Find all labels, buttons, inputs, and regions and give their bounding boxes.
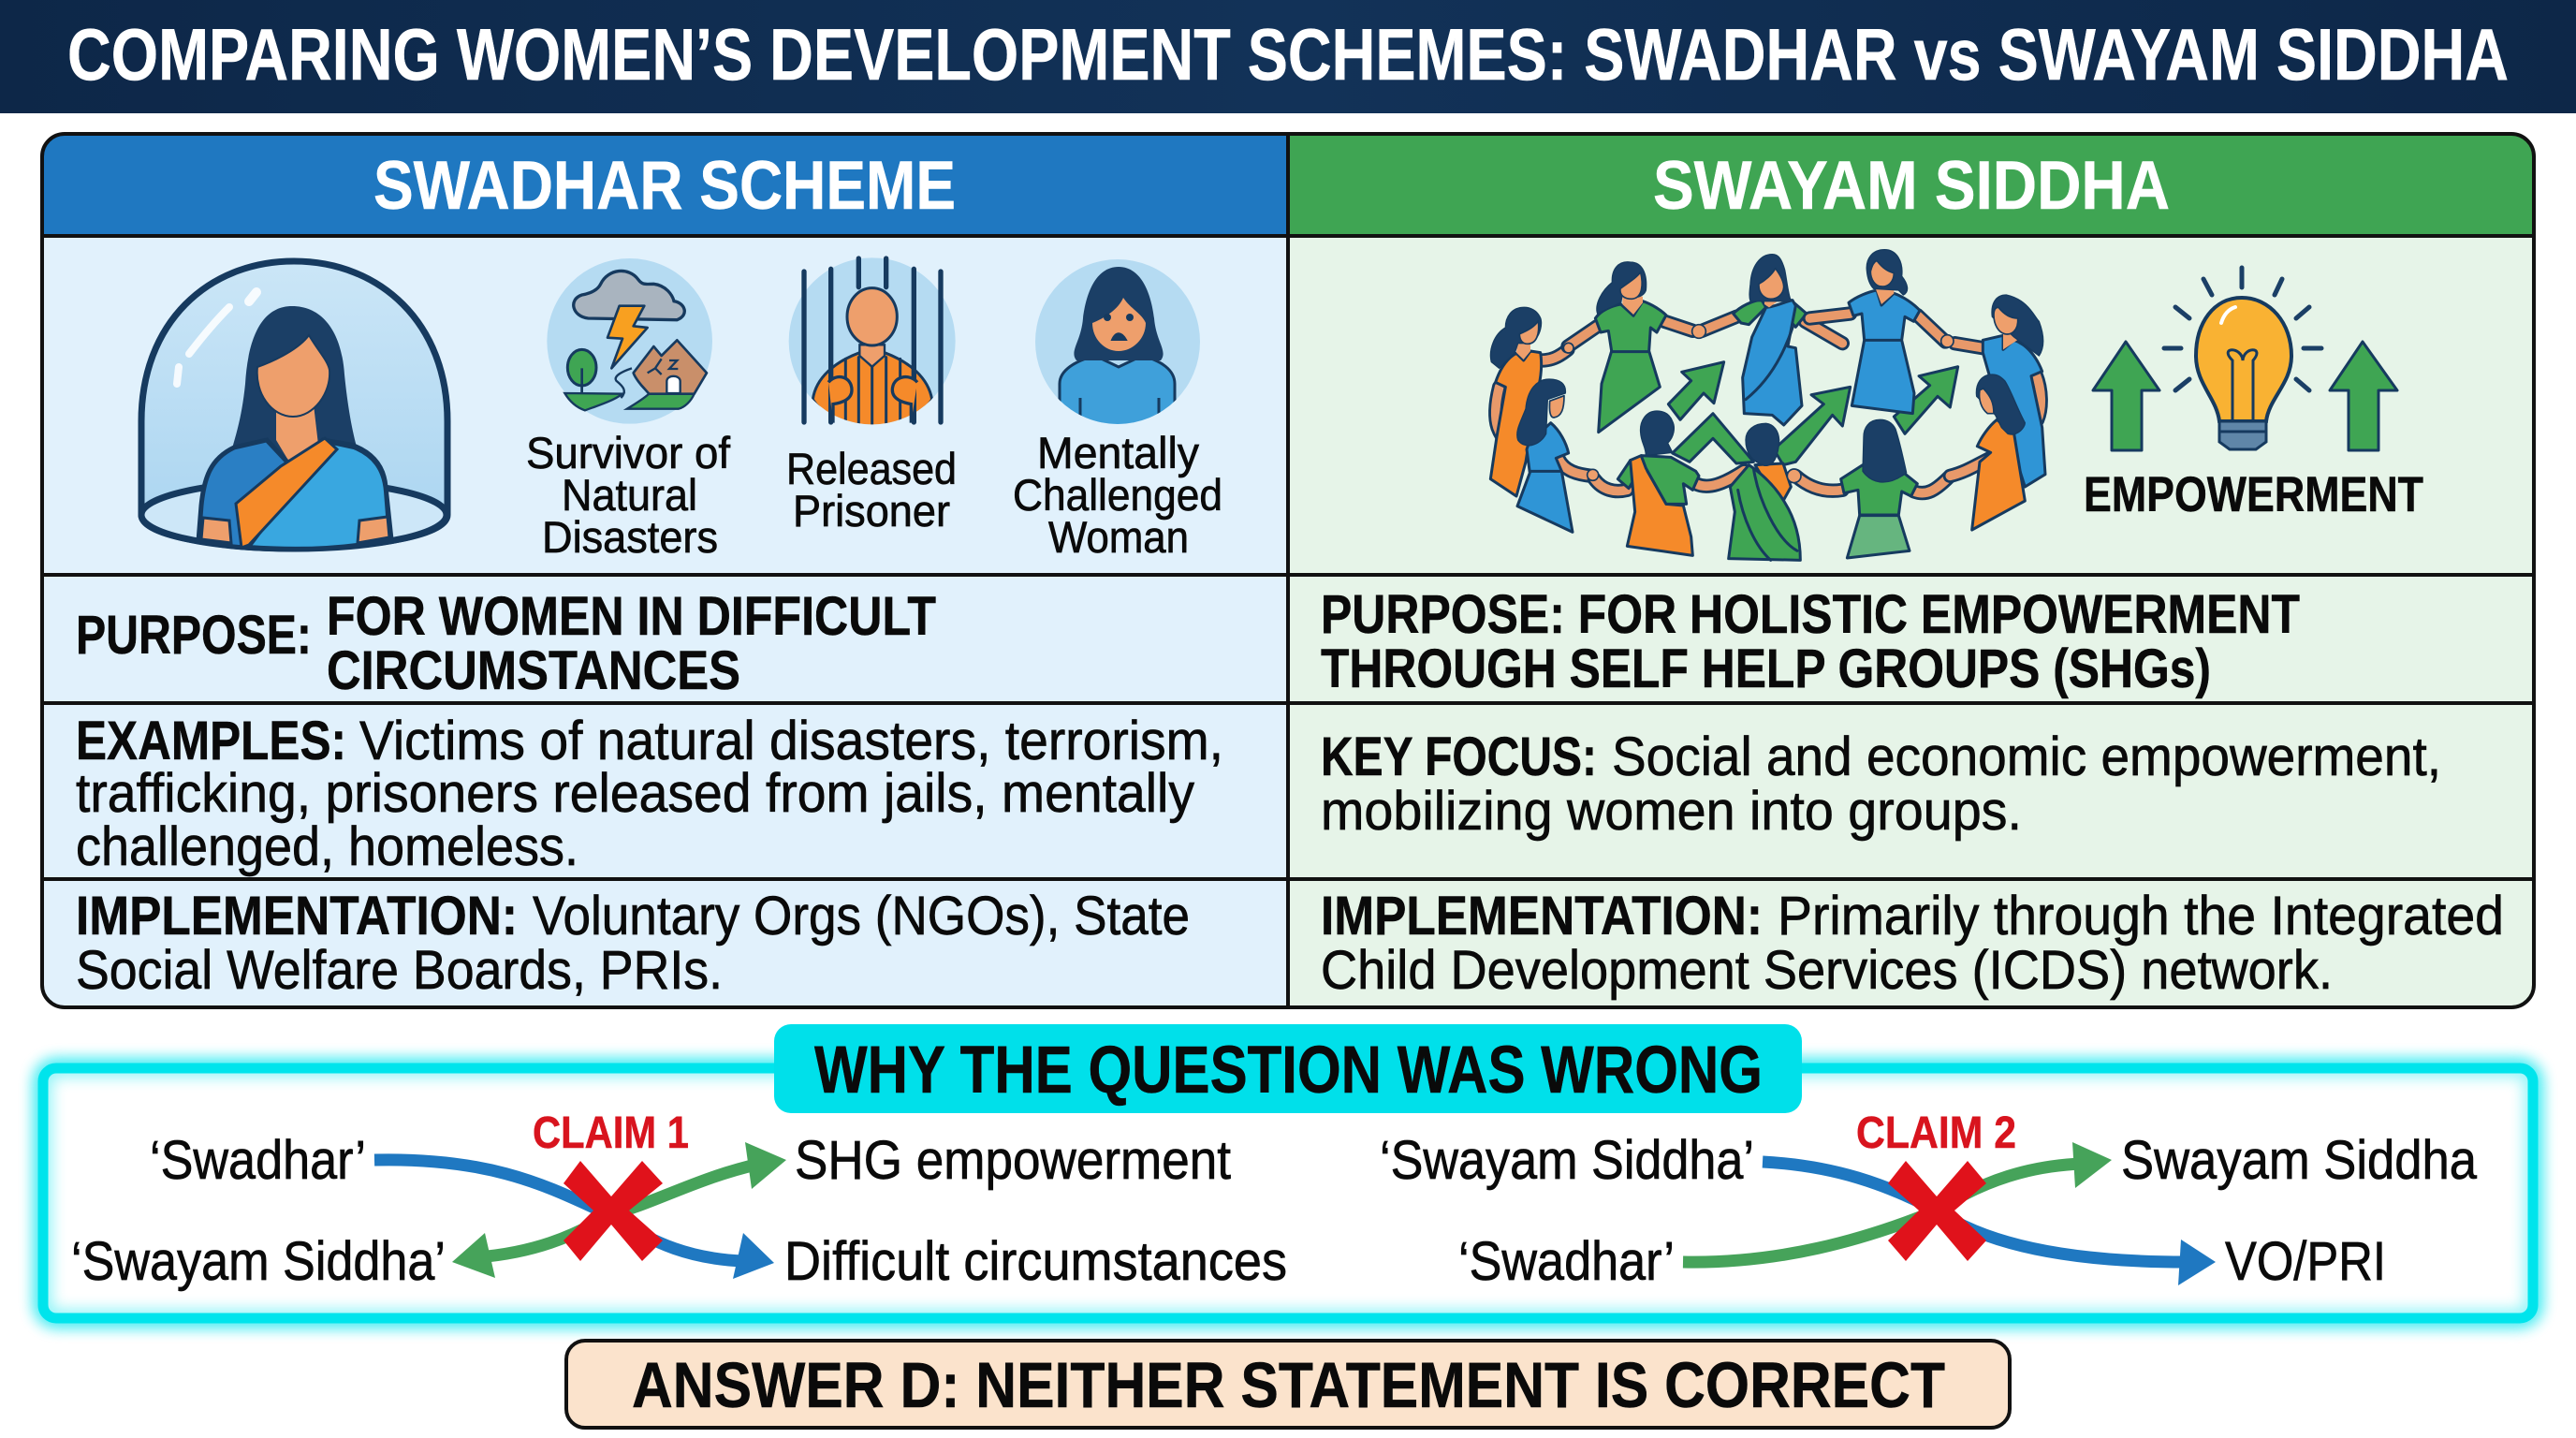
label: released prisoner: Prisoner: [793, 486, 950, 536]
text: swayam siddha implementation: Child Development Services (ICDS) network.: [1321, 940, 2333, 1001]
panel: why the question was wrong: [43, 1024, 2533, 1318]
text: swadhar implementation: Voluntary Orgs (NGOs), State: [533, 886, 1190, 946]
label: mentally challenged woman: [1013, 428, 1222, 562]
text: swayam siddha implementation: [1321, 886, 2504, 1001]
text: swayam siddha implementation: Primarily through the Integrated: [1778, 886, 2504, 946]
icon: natural disaster: [547, 258, 712, 424]
label: released prisoner: Released: [786, 444, 957, 493]
diagram: claim 1: Difficult circumstances: [784, 1231, 1287, 1292]
heading: swadhar scheme: [43, 135, 1288, 236]
panel: swadhar scheme column: [43, 135, 1288, 1006]
text: swayam siddha purpose: [1321, 584, 2300, 699]
answer banner: ANSWER D: NEITHER STATEMENT IS CORRECT: [632, 1349, 1945, 1421]
figure: blue right: [1941, 295, 2045, 487]
icon: released prisoner: [789, 257, 956, 428]
text: swayam siddha key focus: KEY FOCUS:: [1321, 726, 1597, 787]
diagram: claim 1: [71, 1108, 1287, 1292]
table borders: [42, 134, 2534, 1007]
text: swadhar purpose: CIRCUMSTANCES: [327, 640, 740, 701]
text: swadhar purpose: [76, 586, 936, 701]
heading: swadhar scheme: SWADHAR SCHEME: [373, 148, 956, 224]
label: survivor of natural disasters: Survivor of: [526, 428, 731, 477]
text: swadhar implementation: Social Welfare Boards, PRIs.: [76, 940, 723, 1001]
text: swadhar purpose: PURPOSE:: [76, 605, 312, 666]
figure: orange left: [1490, 307, 1568, 496]
text: swadhar examples: trafficking, prisoners released from jails, mentally: [76, 763, 1194, 824]
heading: swayam siddha: SWAYAM SIDDHA: [1653, 148, 2170, 224]
diagram: claim 1: CLAIM 1: [533, 1108, 689, 1158]
figure: blue left front: [1517, 379, 1591, 532]
diagram: claim 2: VO/PRI: [2225, 1231, 2386, 1292]
text: swayam siddha purpose: THROUGH SELF HELP GROUPS (SHGs): [1321, 638, 2211, 699]
text: swadhar examples: [76, 711, 1223, 877]
arrow: blue crossing: [1763, 1162, 2216, 1285]
label: mentally challenged woman: Woman: [1048, 512, 1189, 562]
text: swadhar examples: challenged, homeless.: [76, 816, 578, 877]
text: swadhar examples: EXAMPLES:: [76, 711, 346, 771]
figure: green sari back: [1729, 423, 1842, 560]
diagram: claim 2: Swayam Siddha: [2121, 1130, 2478, 1191]
diagram: claim 1: SHG empowerment: [795, 1130, 1231, 1191]
growth arrows: [1668, 362, 1958, 465]
icon: up arrow right: [2330, 342, 2397, 450]
diagram: claim 2: ‘Swayam Siddha’: [1380, 1130, 1754, 1191]
icon: up arrow left: [2093, 342, 2159, 450]
label: released prisoner: [786, 444, 957, 536]
icon: light bulb: [2164, 268, 2321, 449]
diagram: claim 2: CLAIM 2: [1856, 1108, 2016, 1158]
arrow: green crossing: [1683, 1142, 2112, 1262]
text: swayam siddha key focus: mobilizing women into groups.: [1321, 781, 2022, 842]
figure: orange and green back: [1588, 411, 1744, 555]
text: swadhar implementation: IMPLEMENTATION:: [76, 886, 518, 946]
diagram: claim 1: ‘Swadhar’: [150, 1130, 366, 1191]
arrow: blue crossing: [374, 1160, 774, 1279]
icon: mentally challenged woman: [1035, 259, 1200, 426]
heading tab: WHY THE QUESTION WAS WRONG: [814, 1034, 1763, 1108]
figure: green dress: [1563, 262, 1692, 433]
label: survivor of natural disasters: Disasters: [542, 512, 718, 562]
diagram: claim 2: [1380, 1108, 2478, 1292]
text: swayam siddha key focus: [1321, 726, 2441, 842]
label: survivor of natural disasters: [526, 428, 731, 562]
arrow: green crossing: [452, 1142, 786, 1278]
panel: swayam siddha column: [1288, 135, 2533, 1006]
figure: blue sari: [1692, 255, 1842, 425]
diagram: claim 1: ‘Swayam Siddha’: [71, 1231, 446, 1292]
figure: blue dress: [1809, 250, 1945, 414]
text: swayam siddha purpose: PURPOSE: FOR HOLISTIC EMPOWERMENT: [1321, 584, 2300, 645]
icon: woman protected under dome: [141, 261, 447, 550]
label: empowerment: EMPOWERMENT: [2084, 467, 2423, 522]
heading: swayam siddha: [1288, 135, 2533, 236]
text: swayam siddha implementation: IMPLEMENTATION:: [1321, 886, 1763, 946]
diagram: claim 2: ‘Swadhar’: [1458, 1231, 1675, 1292]
label: mentally challenged woman: Challenged: [1013, 470, 1222, 520]
icon: red cross: [564, 1161, 663, 1261]
text: swadhar examples: Victims of natural disasters, terrorism,: [359, 711, 1223, 771]
figure: orange right front: [1950, 374, 2025, 530]
text: swayam siddha key focus: Social and economic empowerment,: [1612, 726, 2441, 787]
icon: red cross: [1888, 1161, 1986, 1261]
figure: green back: [1841, 419, 1949, 558]
label: mentally challenged woman: Mentally: [1037, 428, 1199, 477]
text: swadhar purpose: FOR WOMEN IN DIFFICULT: [327, 586, 936, 647]
text: swadhar implementation: [76, 886, 1190, 1001]
icon: women holding hands in a circle: [1490, 250, 2045, 560]
label: survivor of natural disasters: Natural: [562, 470, 697, 520]
